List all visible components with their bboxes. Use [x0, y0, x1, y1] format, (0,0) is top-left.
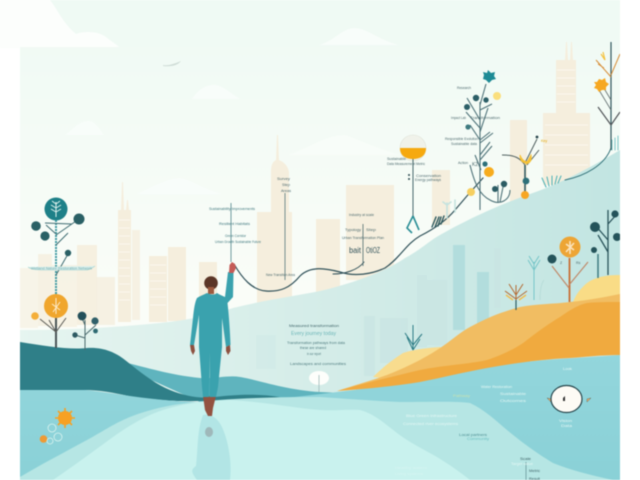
right tree cluster [528, 210, 621, 302]
annotation text: Green Corridor [225, 234, 247, 238]
central text block: Landscapes and communities [290, 362, 346, 366]
left tree [28, 198, 95, 348]
building window stripes [119, 70, 588, 305]
small orange flower plant [502, 136, 547, 199]
top leaf circle [44, 198, 68, 220]
white marker [309, 371, 329, 392]
bottom scale [511, 457, 540, 480]
right tree cluster: Rs [576, 261, 581, 265]
bottom scale: Metric [529, 469, 540, 473]
tall plant with labels: Sustainable data [451, 142, 477, 146]
right tree cluster: Z [560, 261, 563, 265]
tall plant with labels: Responsible Evolution [445, 137, 478, 141]
tall plant with labels: Research [457, 86, 471, 90]
small dark tree [72, 312, 99, 350]
city skyline [20, 42, 590, 328]
water labels: Local partners [459, 433, 487, 437]
left tree: Wetland Nature Restoration Network [31, 266, 92, 270]
feet [203, 396, 216, 416]
tower annotation: New Transition Area [266, 273, 295, 277]
dark teal hill [20, 342, 280, 401]
medium teal hill [83, 349, 345, 402]
water labels: Community [467, 437, 489, 441]
annotation stem [230, 203, 232, 262]
building annotation: bait [349, 246, 362, 255]
gauge icon with annotation: Data Measurement Metric [387, 162, 425, 166]
background hill [20, 150, 620, 400]
water labels: Vision [559, 419, 572, 423]
climbing path line [234, 148, 611, 291]
water labels: Water Restoration [481, 385, 512, 389]
gauge icon with annotation: Sustainable [387, 157, 406, 161]
tower annotation: Survey [277, 177, 290, 181]
small orange flower plant: Key [541, 139, 547, 143]
central text block: Measured transformation [289, 324, 339, 328]
orange hill: yellow [373, 347, 450, 380]
gauge icon with annotation [387, 135, 441, 233]
teal shrub [405, 325, 422, 350]
teal sprout [528, 256, 540, 300]
plants on slope [432, 136, 618, 227]
person [190, 262, 236, 416]
water labels: Look [563, 367, 572, 371]
bottom scale: Target value [511, 462, 533, 466]
figure reflection [192, 415, 231, 480]
tower annotation: Areas [281, 189, 291, 193]
water labels: Healthy waters [395, 466, 427, 470]
annotation text: Resilient Habitats [219, 222, 250, 226]
clouds [0, 0, 400, 194]
building annotation: OtiOZ [366, 246, 380, 255]
orange hill: dark [337, 302, 620, 391]
water labels [395, 367, 573, 476]
dark tree [595, 210, 617, 275]
water [20, 355, 620, 480]
gold circle [44, 294, 68, 318]
top right plant [594, 42, 620, 150]
water labels: Connected river ecosystems [403, 422, 458, 426]
tall plant with labels: Action [458, 161, 468, 165]
water labels: Outcomes [500, 399, 526, 403]
annotation text [209, 207, 261, 244]
building annotation: Typology [345, 228, 361, 232]
bottom scale: Scale [520, 457, 531, 461]
wide label band [28, 266, 95, 270]
building annotation: Industry at scale [349, 213, 374, 217]
water labels: Data [561, 424, 573, 428]
tall plant with labels: K2 [472, 162, 478, 168]
annotation column left [209, 203, 261, 262]
water lightest layer [53, 400, 470, 480]
annotation text: Urban Growth Sustainable Future [215, 240, 261, 244]
head [204, 276, 218, 290]
water labels: Pathway [453, 394, 470, 398]
hands [190, 345, 195, 355]
building annotation: Urban Transformation Plan [342, 236, 384, 240]
tall plant with labels: Impact Lab [451, 116, 466, 120]
water labels: Living systems [395, 472, 423, 476]
bird [163, 61, 181, 66]
tall plant with labels [445, 70, 510, 210]
water labels: Blue Green Infrastructure [406, 414, 457, 418]
faint hillside city [256, 245, 501, 376]
gauge icon with annotation: Conservation [416, 174, 441, 178]
central text block: in our report [307, 352, 322, 356]
tower annotation [266, 177, 295, 280]
central text block: Transformation pathways from data [287, 341, 346, 345]
small autumn tree [505, 284, 527, 310]
neck [208, 287, 214, 294]
orange hill: right yellow [573, 275, 620, 302]
water pale layer [20, 397, 613, 480]
orange tree [568, 258, 570, 302]
leaf star [483, 70, 496, 83]
central text block: these are shared [300, 346, 326, 350]
orange hill: medium [337, 294, 620, 391]
water labels: Sustainable [500, 392, 526, 396]
gauge icon with annotation: Energy pathways [415, 178, 441, 182]
tall plant with labels: Transformation [470, 116, 500, 120]
body [190, 272, 234, 397]
eye icon [547, 386, 591, 412]
tower annotation: Step [282, 183, 290, 187]
central text block: Every journey today [291, 331, 336, 337]
building annotation [342, 213, 384, 266]
building annotation: Step [366, 228, 376, 232]
central text block [287, 324, 346, 366]
annotation text: Sustainability Improvements [209, 207, 255, 211]
bottom left sun icons [40, 408, 75, 444]
